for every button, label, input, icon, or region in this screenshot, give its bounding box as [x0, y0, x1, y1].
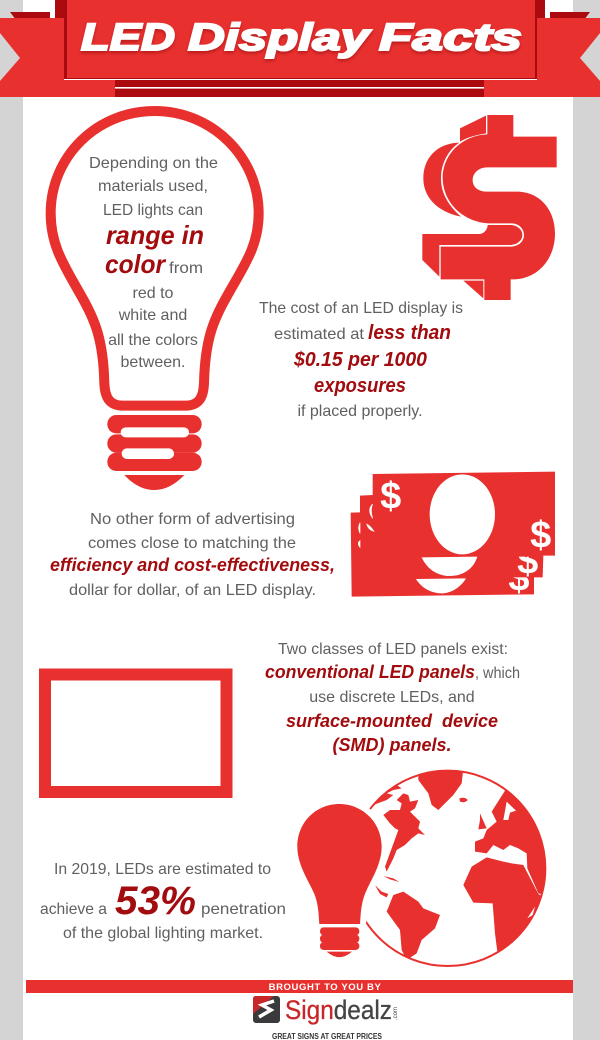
text: cost effectiveness: comes close to matching the — [88, 535, 296, 552]
text: market penetration — [40, 861, 286, 942]
ribbon tail right — [484, 18, 600, 97]
text: market penetration: achieve a — [40, 901, 107, 918]
text: range in color: from — [169, 260, 203, 277]
text: cost per exposure: if placed properly. — [297, 403, 423, 420]
text: panel classes: use discrete LEDs, and — [309, 689, 475, 706]
text: market penetration: penetration — [201, 901, 286, 918]
icon: stacked banknotes: $ — [530, 515, 551, 557]
text: range in color: white and — [118, 307, 187, 324]
text: range in color: LED lights can — [103, 202, 203, 219]
icon: dollar sign — [422, 115, 557, 300]
text: market penetration: In 2019, LEDs are estimated to — [54, 861, 271, 878]
footer credit bar: BROUGHT TO YOU BY — [269, 982, 381, 993]
icon: stacked banknotes — [351, 472, 555, 600]
text: range in color: red to — [133, 285, 174, 302]
icon: stacked banknotes: $ — [517, 540, 538, 582]
text: cost per exposure: The cost of an LED display is — [259, 300, 463, 317]
text: range in color: Depending on the — [89, 155, 218, 172]
text: panel classes: surface-mounted device — [286, 711, 498, 731]
logo: Signdealz — [253, 995, 399, 1040]
logo: Signdealz: Signdealz — [285, 995, 392, 1025]
text: cost effectiveness: efficiency and cost-effectiveness, — [50, 555, 335, 575]
logo: Signdealz: .com — [393, 1007, 399, 1020]
icon: stacked banknotes: $ — [380, 475, 401, 517]
footer credit bar — [26, 980, 573, 993]
solid bulb — [297, 804, 382, 957]
title banner — [0, 0, 600, 97]
title text: Display — [188, 17, 371, 59]
text: range in color: range in — [106, 220, 204, 250]
logo icon — [253, 996, 280, 1023]
text: cost per exposure: exposures — [314, 375, 406, 397]
text: range in color: between. — [121, 354, 185, 371]
text: range in color: color — [105, 249, 167, 279]
text: panel classes: (SMD) panels. — [332, 735, 452, 755]
text: cost per exposure: less than — [368, 322, 451, 344]
text: panel classes — [265, 641, 520, 755]
text: cost per exposure — [259, 300, 463, 420]
text: market penetration: of the global lighting market. — [63, 925, 263, 942]
title text: Facts — [379, 17, 522, 59]
title text: LED — [81, 17, 175, 59]
text: range in color — [89, 155, 218, 371]
globe — [366, 770, 546, 967]
text: market penetration: 53% — [115, 879, 196, 923]
text: cost effectiveness — [50, 511, 335, 599]
text: panel classes: , which — [475, 665, 520, 682]
icon: globe with bulb — [297, 768, 553, 966]
text: panel classes: conventional LED panels — [265, 662, 475, 682]
text: range in color: all the colors — [108, 332, 198, 349]
icon: large outlined light bulb — [51, 111, 259, 490]
text: range in color: materials used, — [98, 178, 208, 195]
icon: stacked banknotes: $ — [508, 558, 530, 600]
title text — [81, 17, 522, 59]
text: cost effectiveness: dollar for dollar, of an LED display. — [69, 582, 316, 599]
ribbon tail left — [0, 18, 115, 97]
icon: LED panel frame — [45, 674, 226, 792]
text: panel classes: Two classes of LED panels exist: — [278, 641, 508, 658]
text: cost per exposure: estimated at — [274, 326, 365, 343]
text: cost effectiveness: No other form of advertising — [90, 511, 295, 528]
text: cost per exposure: $0.15 per 1000 — [293, 349, 427, 371]
